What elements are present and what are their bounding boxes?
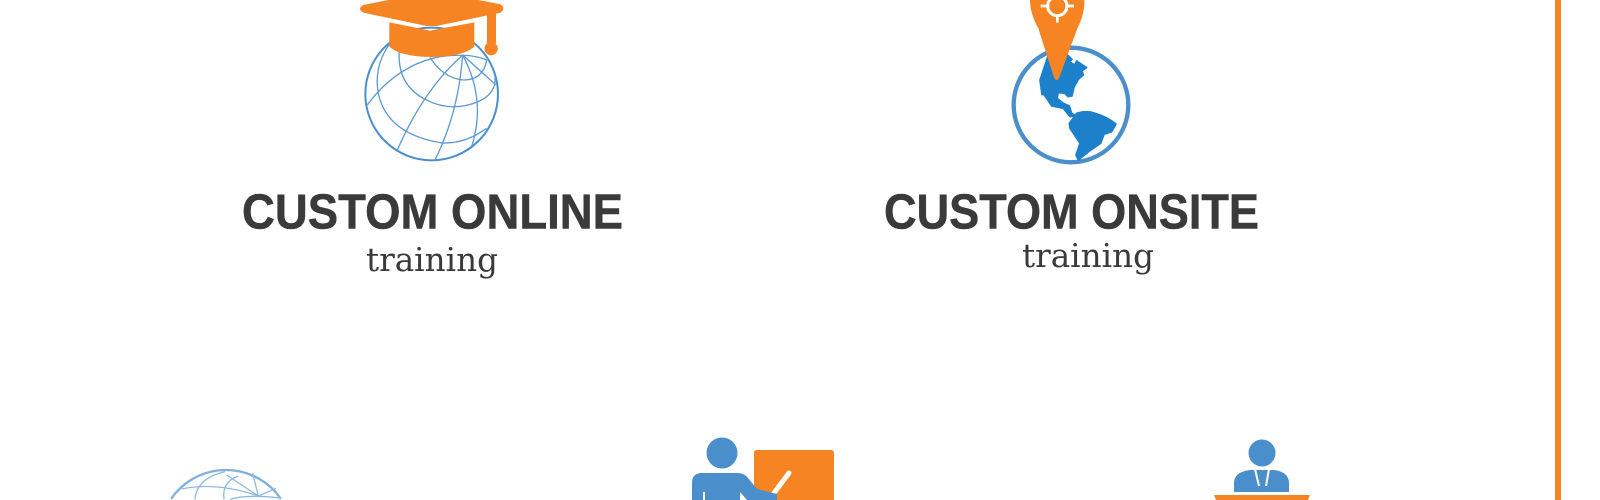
icon: instructor at board — [692, 438, 834, 500]
icon: wireframe globe with graduation cap — [360, 0, 503, 160]
heading: custom online: CUSTOM ONLINE — [242, 186, 623, 240]
text: training: training — [1022, 236, 1154, 275]
vertical orange rule — [1555, 0, 1561, 500]
heading: custom onsite: CUSTOM ONSITE — [884, 186, 1259, 240]
panel: custom onsite training — [884, 0, 1259, 275]
icon: faded wireframe globe — [171, 470, 281, 499]
icon: earth with location pin — [1014, 0, 1128, 162]
icon: speaker at podium — [1214, 440, 1310, 500]
panel: custom online training — [242, 0, 623, 279]
text: training: training — [366, 240, 498, 279]
